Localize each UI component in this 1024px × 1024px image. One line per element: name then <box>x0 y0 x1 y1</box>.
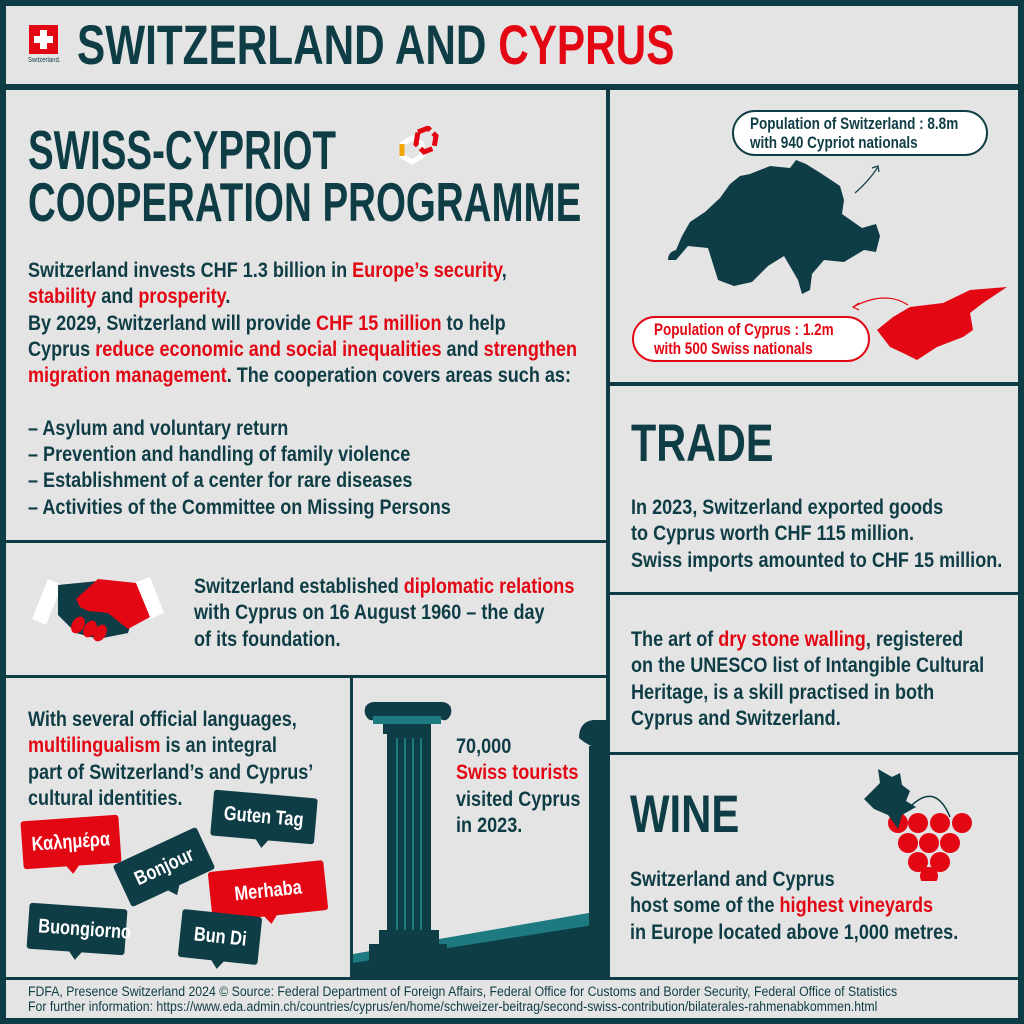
callout: Switzerland population: Population of Switzerland : 8.8m <box>750 115 958 133</box>
map: Switzerland <box>668 160 1007 360</box>
text block <box>631 496 1002 572</box>
text block: Cyprus and Switzerland. <box>631 707 841 730</box>
panel: population maps <box>632 110 1007 362</box>
text block: Switzerland established diplomatic relations <box>194 575 574 598</box>
speech bubbles: Καλημέρα <box>31 828 111 856</box>
panel: tourists <box>353 702 606 977</box>
text block <box>28 708 313 810</box>
text block: – Asylum and voluntary return <box>28 417 288 440</box>
text block: 70,000 <box>456 735 511 758</box>
speech bubbles: Merhaba <box>233 877 303 905</box>
callout: Switzerland population <box>732 110 988 156</box>
text block: with Cyprus on 16 August 1960 – the day <box>194 601 545 624</box>
speech bubbles: Buongiorno <box>38 915 132 944</box>
callout: Cyprus population <box>632 316 870 362</box>
text block: on the UNESCO list of Intangible Cultural <box>631 654 984 677</box>
callout: Cyprus population: Population of Cyprus : 1.2m <box>654 321 834 339</box>
heading <box>28 119 581 233</box>
footer: sources: For further information: https://www.eda.admin.ch/countries/cyprus/en/home/schweizer-beitrag/second-swiss-contribution/bilaterales-rahmenabkommen.html <box>28 999 877 1014</box>
text block: Switzerland invests CHF 1.3 billion in Europe’s security, <box>28 259 507 282</box>
text block: part of Switzerland’s and Cyprus’ <box>28 761 313 784</box>
text block: – Prevention and handling of family violence <box>28 443 410 466</box>
speech bubbles: Guten Tag <box>223 803 305 831</box>
text block: in 2023. <box>456 814 522 837</box>
callout: Switzerland population: with 940 Cypriot nationals <box>750 134 918 152</box>
speech bubbles: Bonjour <box>131 844 197 890</box>
panel: trade <box>631 414 1002 572</box>
text block <box>456 735 580 837</box>
icon: grapes <box>864 769 972 881</box>
speech bubbles: Bun Di <box>193 923 247 951</box>
text block: With several official languages, <box>28 708 297 731</box>
text block <box>194 575 574 651</box>
speech bubbles <box>20 790 328 969</box>
icon: linked hexagons <box>400 126 439 165</box>
heading: COOPERATION PROGRAMME <box>28 171 581 233</box>
logo: Swiss flag: Switzerland. <box>28 57 60 64</box>
heading: TRADE <box>631 414 773 473</box>
illustration: columns <box>353 702 606 977</box>
text block: Heritage, is a skill practised in both <box>631 681 934 704</box>
panel: dry stone walling <box>631 628 984 730</box>
panel: diplomatic relations <box>32 575 574 651</box>
panel: wine <box>630 769 972 944</box>
title: SWITZERLAND AND CYPRUS <box>77 13 674 76</box>
text block: The art of dry stone walling, registered <box>631 628 963 651</box>
logo: Swiss flag <box>28 25 60 64</box>
text block <box>631 628 984 730</box>
text block: By 2029, Switzerland will provide CHF 15 million to help <box>28 312 506 335</box>
text block <box>28 259 577 519</box>
text block: to Cyprus worth CHF 115 million. <box>631 522 914 545</box>
text block: visited Cyprus <box>456 788 580 811</box>
text block: Cyprus reduce economic and social inequalities and strengthen <box>28 338 577 361</box>
text block: – Establishment of a center for rare diseases <box>28 469 412 492</box>
text block: migration management. The cooperation covers areas such as: <box>28 364 571 387</box>
text block: – Activities of the Committee on Missing Persons <box>28 496 451 519</box>
text block: multilingualism is an integral <box>28 734 277 757</box>
footer: sources: FDFA, Presence Switzerland 2024 © Source: Federal Department of Foreign Affairs, Federal Office for Customs and Border Security, Federal Office of Statistics <box>28 984 897 999</box>
panel: cooperation programme <box>28 119 581 519</box>
text block: In 2023, Switzerland exported goods <box>631 496 943 519</box>
footer: sources <box>28 984 897 1014</box>
text block: in Europe located above 1,000 metres. <box>630 921 958 944</box>
heading: SWISS-CYPRIOT <box>28 119 336 181</box>
text block: stability and prosperity. <box>28 285 230 308</box>
text block: Swiss tourists <box>456 761 578 784</box>
text block: cultural identities. <box>28 787 183 810</box>
text block: Switzerland and Cyprus <box>630 868 835 891</box>
panel: multilingualism <box>20 708 328 969</box>
heading: WINE <box>630 785 739 844</box>
text block: host some of the highest vineyards <box>630 894 933 917</box>
map: Cyprus <box>877 287 1007 360</box>
callout: Cyprus population: with 500 Swiss nationals <box>654 340 813 358</box>
text block: Swiss imports amounted to CHF 15 million. <box>631 549 1002 572</box>
icon: handshake <box>32 577 164 642</box>
text block <box>630 868 958 944</box>
text block: of its foundation. <box>194 628 340 651</box>
